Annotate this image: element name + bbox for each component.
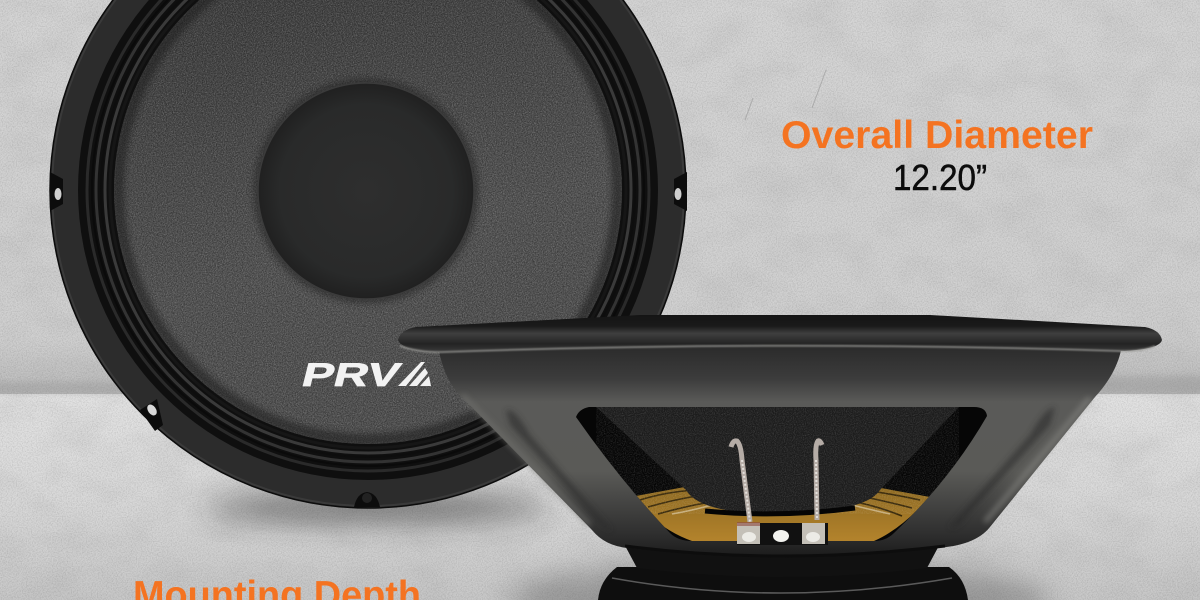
heading: overall diameter: Overall Diameter xyxy=(781,114,1093,157)
side-view speaker xyxy=(398,315,1162,600)
left tinsel lead wire xyxy=(731,441,750,522)
rim xyxy=(398,315,1162,352)
floor shadows xyxy=(205,494,1050,600)
gold spider xyxy=(630,486,930,541)
magnet xyxy=(598,540,968,600)
PRV logo xyxy=(298,357,431,394)
mounting holes xyxy=(50,172,687,507)
surround ridges xyxy=(78,0,658,480)
front-facing speaker xyxy=(50,0,687,508)
terminal block xyxy=(737,522,828,545)
basket xyxy=(438,345,1122,556)
right tinsel lead wire xyxy=(816,441,822,520)
basket window xyxy=(576,407,987,541)
dust cap xyxy=(253,78,479,304)
value: overall diameter: 12.20” xyxy=(893,157,987,198)
speaker frame xyxy=(50,0,686,508)
PRV logo: PRV xyxy=(298,357,405,394)
rear of cone xyxy=(596,407,959,514)
cone xyxy=(110,0,630,450)
